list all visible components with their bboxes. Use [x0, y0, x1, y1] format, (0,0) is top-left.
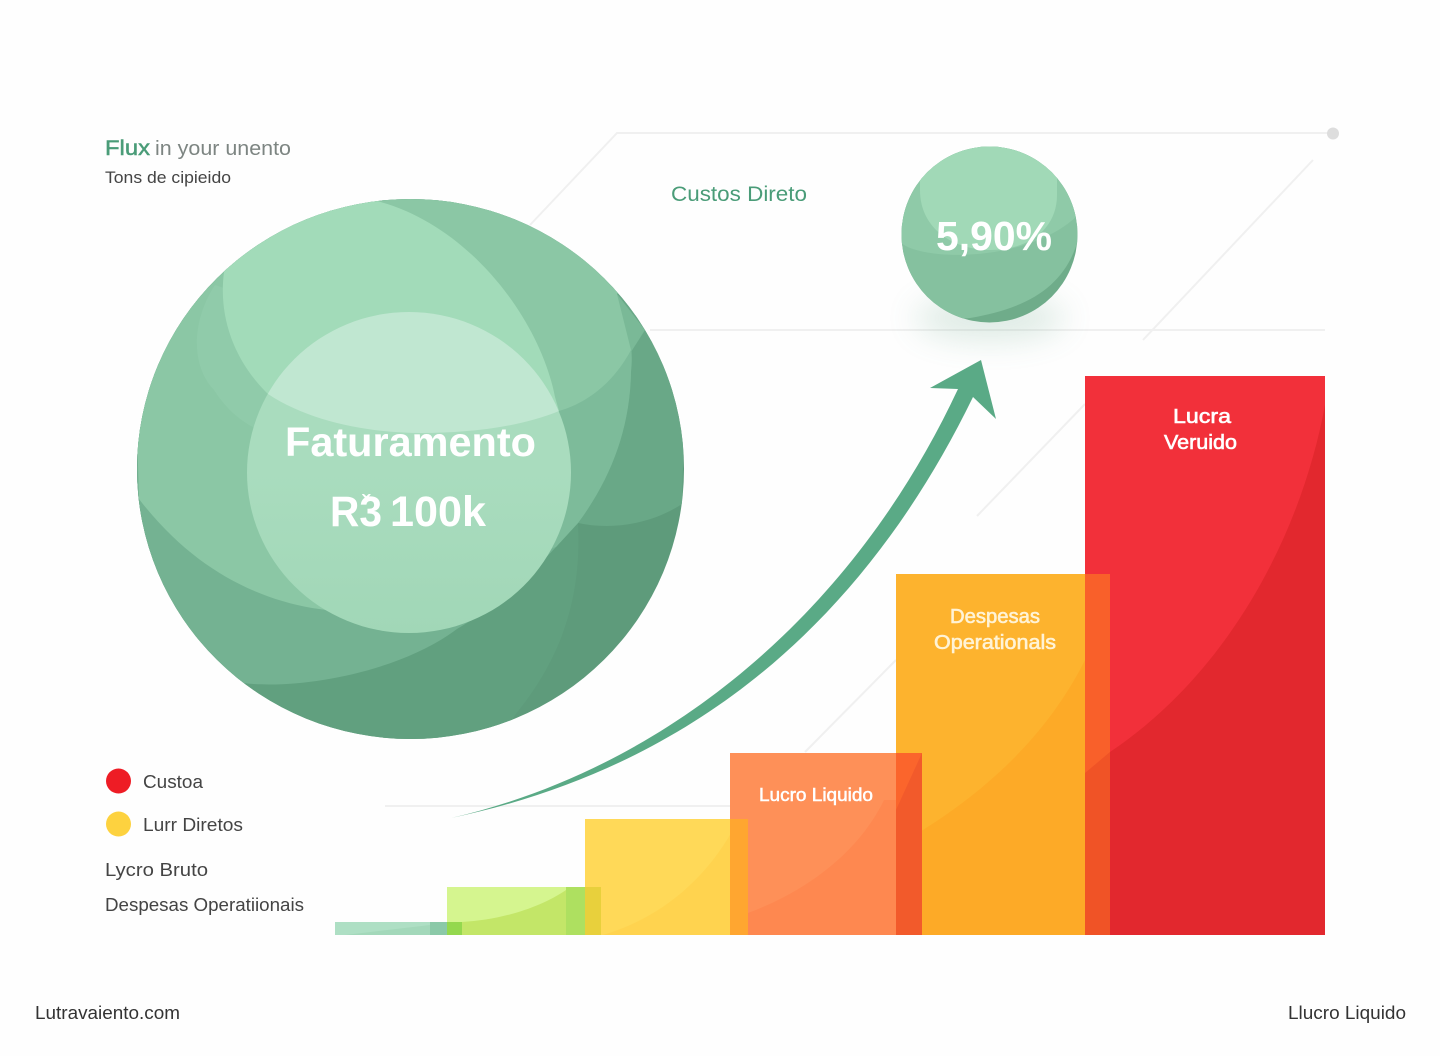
revenue value: ˇ	[362, 491, 371, 518]
heading: flux: Flux	[105, 137, 151, 160]
legend	[105, 768, 304, 915]
bar label: Lucra Veruido: Lucra	[1173, 406, 1232, 428]
heading: flux	[105, 137, 291, 160]
step bars chart	[335, 376, 1330, 940]
legend item: Lycro Bruto: Lycro Bruto	[105, 860, 208, 880]
legend item: Custoa: Custoa	[143, 772, 204, 792]
large circle: Faturamento	[130, 190, 700, 760]
revenue label: Faturamento	[285, 419, 536, 465]
legend item: Lurr Diretos: Lurr Diretos	[143, 815, 243, 835]
percentage value: 5,90%	[936, 213, 1052, 259]
revenue value	[330, 488, 486, 536]
revenue value: R3	[330, 488, 382, 536]
bar label: Lucra Veruido	[1164, 406, 1237, 454]
bar label: Despesas Operationals: Operationals	[934, 632, 1056, 654]
legend item: Lurr Diretos	[106, 812, 243, 836]
bar label: Despesas Operationals	[934, 606, 1056, 654]
bar label: Lucro Liquido: Lucro Liquido	[759, 785, 873, 805]
heading: flux: in your unento	[155, 138, 291, 160]
footer left: Lutravaiento.com	[35, 1003, 180, 1023]
legend item: Despesas Operatiionais: Despesas Operatiionais	[105, 895, 304, 915]
bar: red	[1085, 376, 1325, 935]
bar label: Lucra Veruido: Veruido	[1164, 432, 1237, 454]
revenue value: 100k	[390, 488, 486, 536]
footer right: Llucro Liquido	[1288, 1003, 1406, 1023]
subheading: Tons de cipieido	[105, 168, 231, 187]
small circle: percentage	[895, 140, 1080, 340]
growth arrow	[451, 360, 996, 818]
bar label: Despesas Operationals: Despesas	[950, 606, 1040, 628]
bar: yellow	[585, 819, 750, 940]
legend item: Custoa	[106, 768, 204, 794]
bar: amber	[890, 574, 1115, 940]
bar: lime	[447, 887, 585, 935]
small label: Custos Direto: Custos Direto	[671, 183, 807, 206]
inner circle	[247, 312, 571, 633]
bar: orange	[725, 753, 925, 940]
bar: teal	[335, 922, 462, 935]
